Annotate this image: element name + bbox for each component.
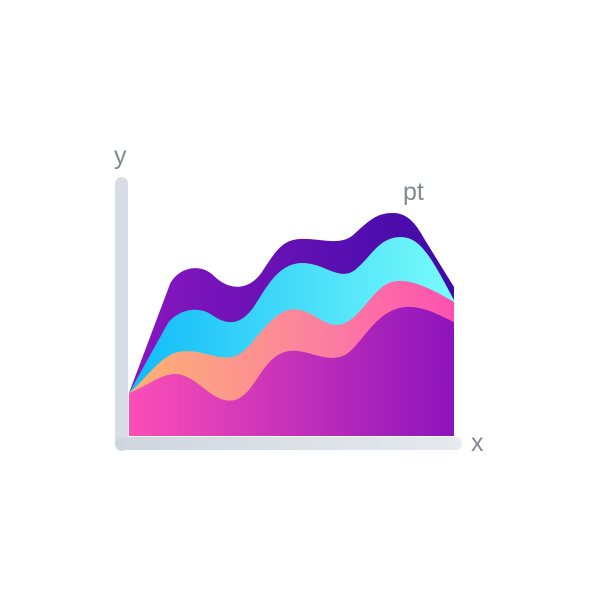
layer: pink [129, 281, 454, 436]
layer: cyan [129, 237, 454, 436]
label: x: x [471, 429, 484, 457]
layer: magenta [129, 307, 454, 436]
label: y: y [114, 142, 127, 170]
layer: dark purple [129, 213, 454, 436]
label: pt: pt [403, 178, 424, 206]
x axis [115, 437, 462, 450]
y axis [115, 177, 128, 451]
